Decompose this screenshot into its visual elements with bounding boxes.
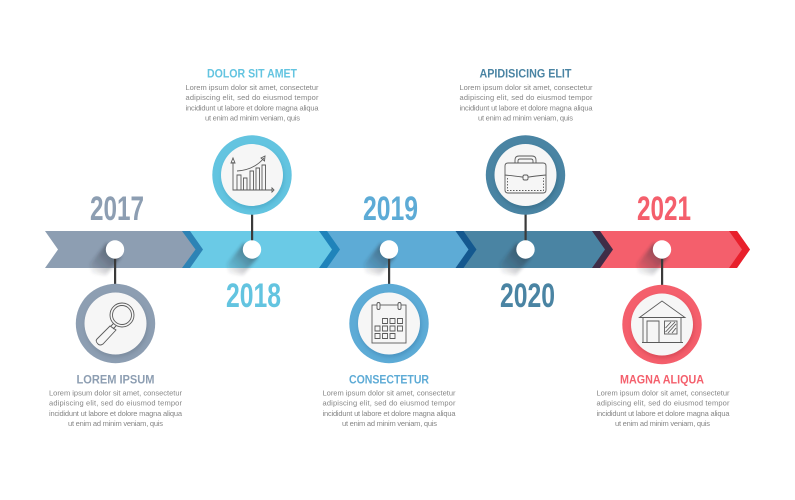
dot shadow	[637, 243, 668, 275]
inner disc	[84, 292, 146, 354]
icon: magnifier	[96, 303, 134, 345]
body text	[49, 388, 183, 428]
year 2020: 2020	[500, 277, 555, 315]
chevron: 2020 end	[592, 231, 613, 268]
body text: adipiscing elit, sed do eiusmod tempor	[596, 398, 730, 408]
step 2019	[322, 190, 456, 428]
connector line	[251, 212, 253, 250]
chevron: 2017 end	[182, 231, 203, 268]
timeline arrow band	[45, 231, 750, 268]
chevron: 2021 end	[729, 231, 750, 268]
body text: ut enim ad minim veniam, quis	[342, 419, 437, 428]
body text: ut enim ad minim veniam, quis	[478, 114, 573, 122]
body text	[596, 388, 730, 428]
segment: 2020	[460, 231, 606, 268]
year 2019: 2019	[363, 190, 418, 228]
ring shadow	[86, 295, 148, 357]
connector line	[524, 212, 527, 250]
icon: bar chart	[231, 156, 274, 192]
connector line	[661, 249, 663, 287]
ring	[349, 284, 429, 363]
dot shadow	[90, 243, 121, 275]
year 2021: 2021	[637, 190, 691, 228]
dot shadow	[364, 243, 395, 275]
body text: Lorem ipsum dolor sit amet, consectetur	[322, 388, 456, 398]
title: DOLOR SIT AMET	[207, 66, 298, 80]
icon: house	[640, 301, 685, 342]
step 2018	[186, 66, 319, 315]
title: APIDISICING ELIT	[480, 66, 572, 80]
body text: incididunt ut labore et dolore magna aliqua	[322, 409, 456, 418]
inner disc	[631, 294, 693, 356]
body text	[186, 83, 319, 122]
body text: adipiscing elit, sed do eiusmod tempor	[460, 93, 593, 102]
title: MAGNA ALIQUA	[620, 372, 704, 386]
connector line	[388, 249, 390, 287]
timeline dot	[106, 240, 124, 259]
timeline dot	[516, 240, 535, 259]
connector line	[114, 249, 116, 287]
body text: ut enim ad minim veniam, quis	[205, 114, 300, 122]
dot shadow	[500, 243, 531, 275]
body text: Lorem ipsum dolor sit amet, consectetur	[460, 83, 593, 92]
chevron: 2019 end	[456, 231, 476, 268]
timeline dot	[380, 240, 398, 259]
step 2021	[596, 190, 730, 428]
body text: Lorem ipsum dolor sit amet, consectetur	[596, 388, 730, 398]
title: LOREM IPSUM	[76, 372, 154, 386]
title: CONSECTETUR	[349, 372, 429, 386]
body text	[322, 388, 456, 428]
body text: Lorem ipsum dolor sit amet, consectetur	[49, 388, 182, 398]
inner disc	[494, 144, 556, 206]
step 2017	[49, 190, 183, 428]
segment: 2017	[45, 231, 196, 268]
chevron: 2018 end	[319, 231, 340, 268]
ring shadow	[632, 296, 694, 358]
ring	[486, 135, 565, 215]
ring shadow	[222, 146, 284, 208]
body text: ut enim ad minim veniam, quis	[68, 419, 163, 428]
body text: incididunt ut labore et dolore magna aliqua	[596, 409, 730, 418]
inner disc	[221, 144, 283, 206]
ring	[212, 135, 292, 215]
timeline dot	[653, 240, 671, 259]
segment: 2021	[600, 231, 750, 268]
ring	[622, 285, 702, 364]
ring shadow	[496, 146, 558, 208]
step 2020	[460, 66, 593, 315]
inner disc	[358, 292, 420, 354]
dot shadow	[227, 243, 258, 275]
body text: incididunt ut labore et dolore magna aliqua	[186, 104, 319, 112]
body text	[460, 83, 593, 122]
timeline dot	[243, 240, 261, 259]
segment: 2019	[325, 231, 469, 268]
year 2017: 2017	[90, 190, 144, 228]
icon: briefcase	[505, 156, 546, 193]
body text: adipiscing elit, sed do eiusmod tempor	[186, 93, 319, 102]
icon: calendar	[372, 302, 406, 343]
body text: incididunt ut labore et dolore magna aliqua	[460, 104, 593, 112]
ring	[76, 284, 155, 363]
body text: adipiscing elit, sed do eiusmod tempor	[49, 398, 182, 408]
year 2018: 2018	[226, 277, 281, 315]
body text: ut enim ad minim veniam, quis	[615, 419, 710, 428]
body text: adipiscing elit, sed do eiusmod tempor	[322, 398, 456, 408]
body text: Lorem ipsum dolor sit amet, consectetur	[186, 83, 319, 92]
segment: 2018	[188, 231, 333, 268]
ring shadow	[359, 295, 421, 357]
body text: incididunt ut labore et dolore magna aliqua	[49, 409, 183, 418]
